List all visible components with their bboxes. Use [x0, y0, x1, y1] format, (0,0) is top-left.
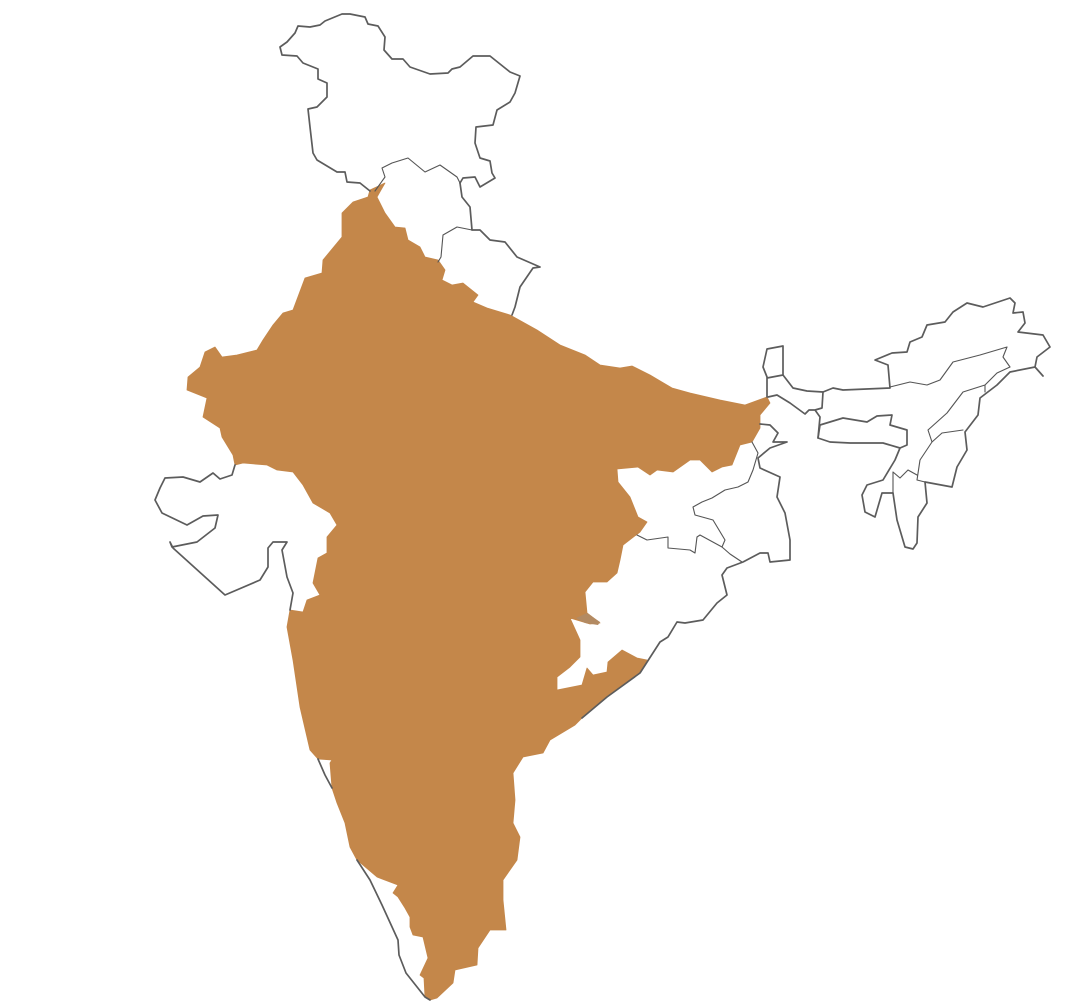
Kerala coast outline	[318, 759, 430, 1000]
Jammu and Kashmir outline	[280, 14, 520, 191]
north Bengal border	[768, 392, 823, 438]
Gujarat outline	[155, 465, 293, 610]
Assam and Arunachal borders	[890, 347, 1010, 493]
Jharkhand and West Bengal border	[693, 442, 758, 547]
highlighted region: orange fill	[187, 183, 770, 1000]
Uttarakhand border	[460, 183, 540, 315]
Odisha border	[637, 535, 742, 562]
Himachal Pradesh border	[375, 158, 460, 191]
east coast outline	[582, 424, 790, 718]
north-east states outer outline	[783, 298, 1050, 549]
Meghalaya outline	[818, 415, 907, 448]
Sikkim outline	[763, 346, 783, 397]
small enclosed patch	[576, 613, 600, 625]
